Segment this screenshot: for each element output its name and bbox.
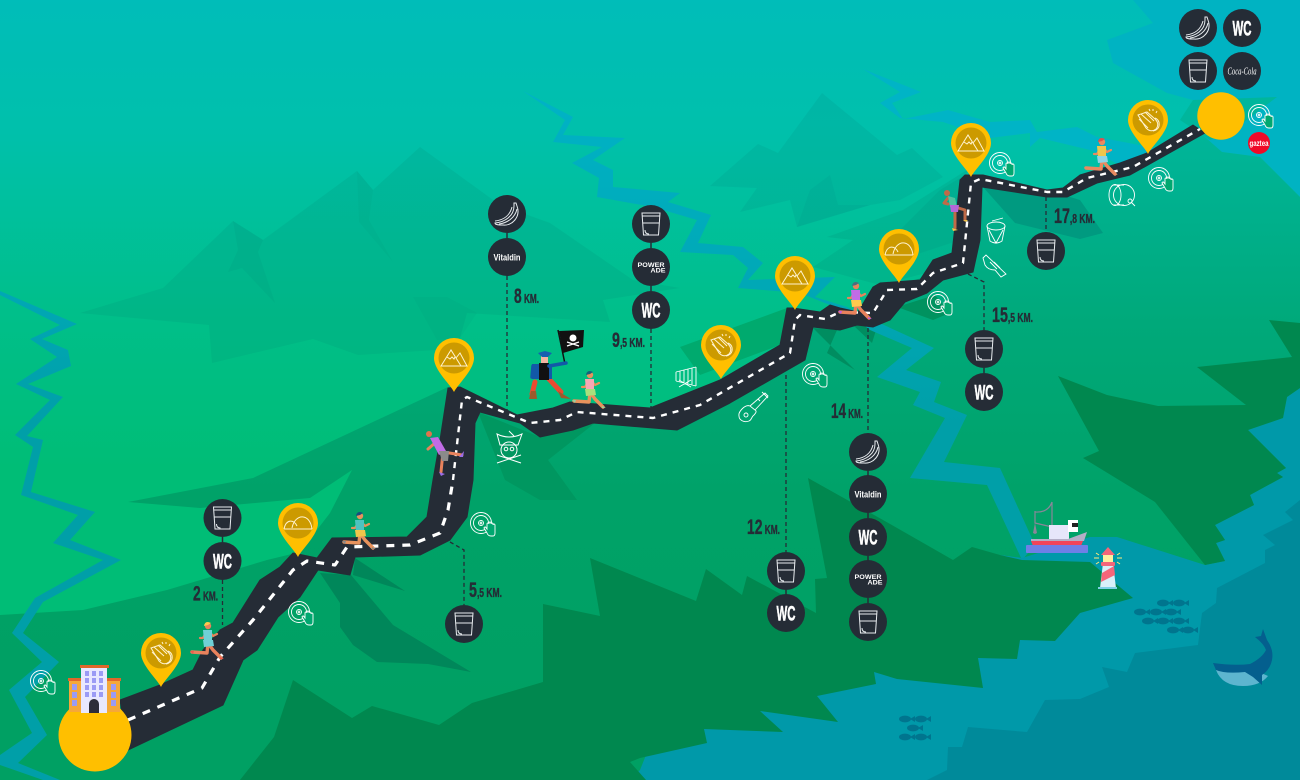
pin: mountain 2 bbox=[775, 256, 815, 310]
hotel at start bbox=[68, 665, 121, 713]
finish services bbox=[1179, 9, 1261, 90]
station 8 km: Vitaldin bbox=[494, 252, 521, 264]
dark teal shadow above road right bbox=[900, 175, 965, 260]
start circle bbox=[58, 698, 132, 772]
finish circle bbox=[1197, 92, 1245, 140]
fish shoal right bbox=[1134, 600, 1198, 633]
station 15.5 km: 15,5 KM. bbox=[992, 304, 1033, 327]
pin: clap 1 bbox=[141, 633, 181, 687]
fish boat bbox=[1026, 502, 1088, 553]
station 14 km: POWER bbox=[854, 574, 882, 581]
station 9.5 km bbox=[612, 205, 670, 410]
icon: xylophone bbox=[676, 367, 696, 387]
finish services: Coca-Cola bbox=[1228, 66, 1257, 78]
station 14 km: 14 KM. bbox=[831, 400, 863, 423]
finish services: WC bbox=[1232, 18, 1252, 40]
land shadows bbox=[320, 187, 1103, 672]
station 5.5 km bbox=[445, 542, 502, 643]
station 9.5 km: ADE bbox=[650, 268, 666, 274]
station 2 km: 2 KM. bbox=[193, 582, 218, 606]
ocean shallow bbox=[630, 388, 1300, 780]
station 14 km bbox=[831, 328, 887, 641]
lighthouse bbox=[1094, 547, 1122, 589]
pin: clap 2 bbox=[701, 325, 741, 379]
station 8 km: 8 KM. bbox=[514, 285, 539, 308]
land tip near finish bbox=[1180, 97, 1277, 140]
station 9.5 km: 9,5 KM. bbox=[612, 329, 645, 352]
blue sea upper right bbox=[1107, 0, 1300, 197]
road bbox=[120, 125, 1205, 750]
station 14 km: Vitaldin bbox=[854, 490, 882, 500]
mountains right bbox=[710, 93, 968, 285]
runner 5 bbox=[1084, 138, 1118, 175]
pirate with flag bbox=[529, 330, 584, 399]
runner 3 bbox=[572, 371, 606, 408]
icon: snare drum bbox=[987, 218, 1005, 243]
pin: mountain 3 bbox=[951, 123, 991, 177]
station 12 km bbox=[747, 375, 805, 632]
icon: guitar bbox=[739, 392, 768, 422]
station 14 km: ADE bbox=[868, 580, 883, 586]
station 8 km bbox=[488, 195, 539, 410]
dark green land lower bbox=[240, 478, 1133, 780]
icon: vinyl DJ bbox=[30, 104, 1273, 694]
icon: trumpet bbox=[983, 255, 1006, 277]
runner climbing bbox=[944, 190, 968, 231]
river upper right bbox=[863, 69, 1170, 170]
icon: pirate skull bbox=[497, 431, 522, 463]
station 15.5 km bbox=[965, 274, 1033, 411]
station 5.5 km: 5,5 KM. bbox=[469, 579, 502, 602]
station 9.5 km: POWER bbox=[638, 262, 665, 269]
station 15.5 km: WC bbox=[974, 382, 994, 404]
station 17.8 km bbox=[1027, 197, 1095, 270]
fish shoal bottom bbox=[899, 716, 931, 740]
station 12 km: WC bbox=[776, 602, 796, 626]
runner 1 bbox=[190, 622, 224, 659]
pin: hills 1 bbox=[278, 503, 318, 557]
river left bbox=[0, 291, 121, 780]
icon: bass drum bbox=[1109, 184, 1135, 206]
river centre bbox=[523, 91, 1035, 560]
gaztea logo: gaztea bbox=[1250, 139, 1269, 148]
runner falling bbox=[426, 431, 464, 476]
pin: hills 2 bbox=[879, 229, 919, 283]
station 12 km: 12 KM. bbox=[747, 516, 780, 539]
pin: mountain 1 bbox=[434, 338, 474, 392]
ocean deep bbox=[927, 500, 1300, 780]
mountains left bbox=[80, 147, 680, 363]
pin: clap 3 bbox=[1128, 100, 1168, 154]
station 2 km: WC bbox=[213, 550, 232, 574]
station 9.5 km: WC bbox=[642, 300, 660, 322]
station 2 km bbox=[193, 499, 242, 625]
station 14 km: WC bbox=[858, 526, 878, 550]
dark green land right bbox=[1058, 320, 1300, 565]
station 17.8 km: 17,8 KM. bbox=[1054, 205, 1095, 228]
gaztea logo bbox=[1248, 132, 1270, 154]
whale bbox=[1213, 629, 1272, 686]
runner 2 bbox=[342, 512, 376, 549]
runner 4 bbox=[838, 282, 872, 319]
